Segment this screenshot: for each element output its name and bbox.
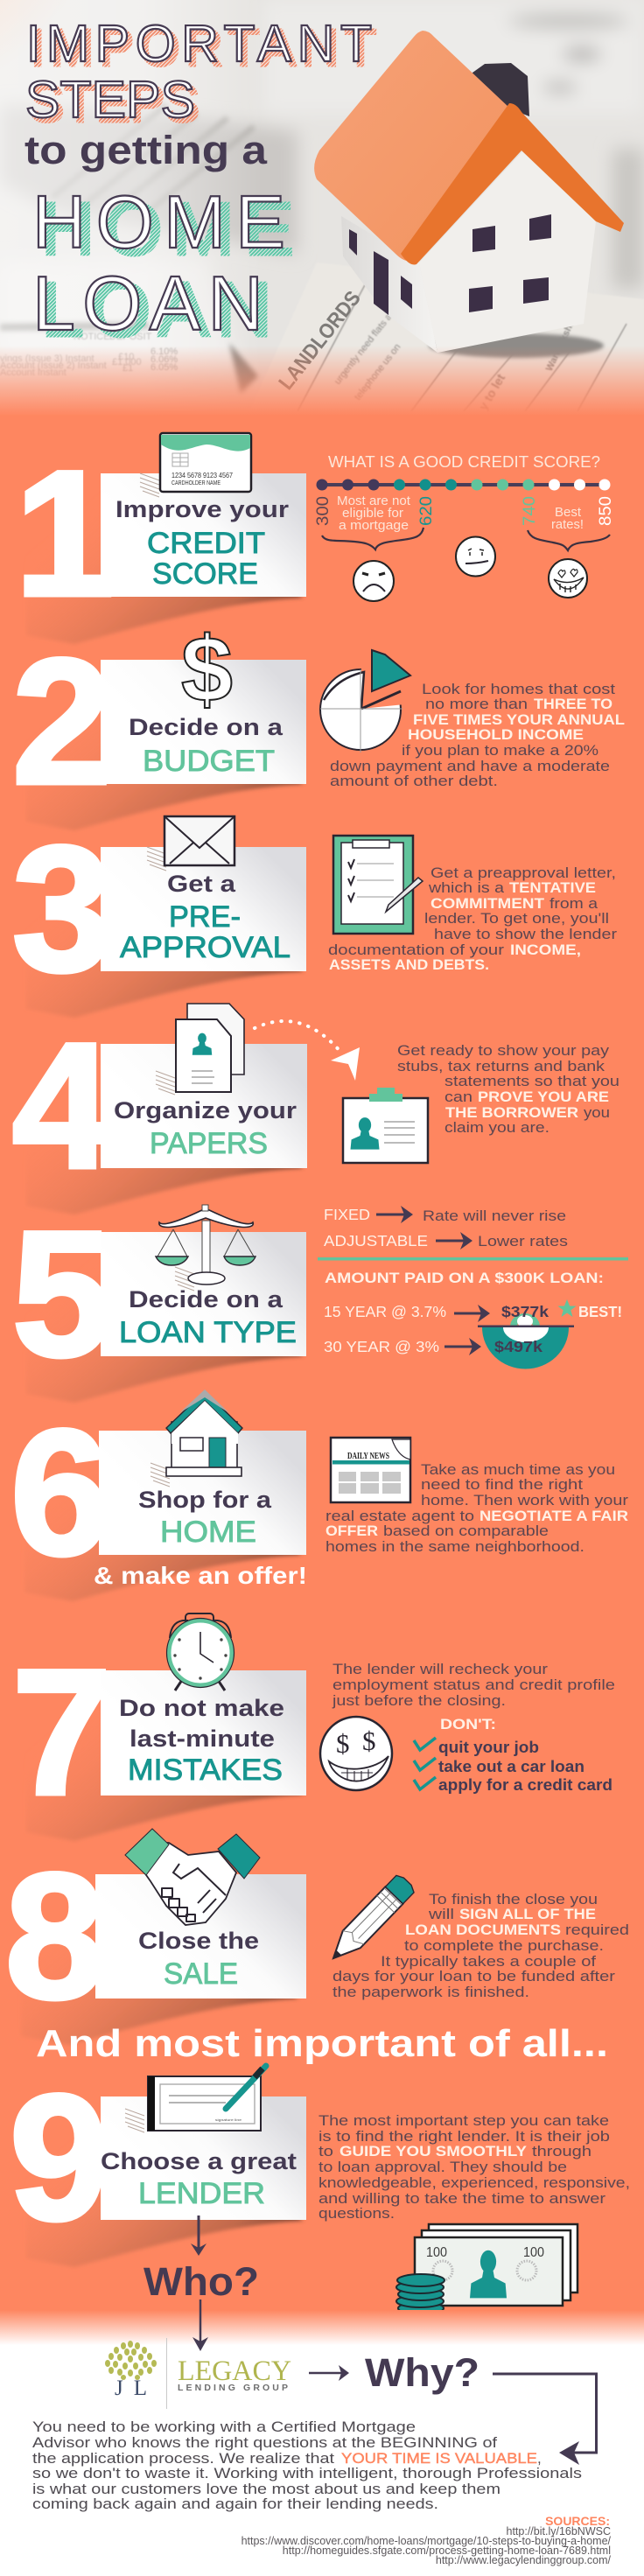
best rates note: Best [555, 505, 582, 520]
text: closing advice [332, 1891, 629, 2000]
heading: Decide on a [129, 714, 284, 740]
text: choosing a lender: and willing to take the time to answer [318, 2190, 606, 2207]
keyword: BUDGET [143, 745, 275, 778]
text: home search advice: home. Then work with your [421, 1492, 628, 1508]
newspaper small print: telephone us on [353, 342, 403, 402]
text: lender recheck: The lender will recheck your [332, 1661, 548, 1677]
keyword: APPROVAL [120, 931, 290, 964]
heading: why: Why? [365, 2350, 480, 2395]
text: pre-approval advice: COMMITMENT [430, 896, 544, 912]
newspaper headline: LANDLORDS: LANDLORDS [274, 287, 366, 395]
sources [242, 2514, 612, 2566]
keyword: LENDER [138, 2177, 265, 2210]
title [24, 15, 376, 353]
arrow: who to logo [192, 2300, 208, 2351]
30 year row: 30 YEAR @ 3% [324, 1338, 439, 1355]
don't list [414, 1717, 612, 1794]
title line: to getting a: to getting a [24, 128, 268, 172]
heading: Do not make [119, 1695, 284, 1721]
brace right [528, 530, 610, 550]
text: pre-approval advice [328, 864, 617, 973]
text: home search advice [326, 1461, 628, 1555]
newspaper small print: NOTICE [74, 332, 110, 342]
text: paperwork advice: claim you are. [444, 1119, 550, 1136]
text: choosing a lender: The most important step you can take [318, 2112, 609, 2129]
make an offer caption: & make an offer! [94, 1562, 307, 1589]
logo tagline: LENDING GROUP [178, 2383, 288, 2393]
newspaper small print: £1,000 [112, 357, 142, 368]
icon: pie chart [320, 648, 411, 752]
score labels [314, 496, 615, 526]
number 3: 3 [12, 809, 111, 1009]
icon: money eyes face [320, 1717, 392, 1790]
step 5 panel: loan type [12, 1194, 306, 1403]
sources: http://bit.ly/16bNWSC [506, 2525, 611, 2538]
number 5: 5 [12, 1194, 111, 1394]
icon: money and coins: 100 [523, 2245, 544, 2260]
text: why choose legacy: , [537, 2450, 542, 2467]
text: closing advice: LOAN DOCUMENTS [405, 1922, 561, 1938]
text: home search advice: based on comparable [383, 1522, 549, 1539]
15 year row [324, 1299, 622, 1322]
not eligible note: Most are not [337, 494, 411, 508]
title line: LOAN: LOAN [41, 266, 272, 353]
text: pre-approval advice: ASSETS AND DEBTS. [329, 957, 489, 973]
icon: house [150, 1390, 242, 1487]
text: closing advice: the paperwork is finished. [332, 1984, 529, 2000]
30 year row: $497k [494, 1338, 542, 1355]
text: paperwork advice: you [584, 1104, 610, 1121]
icon: money and coins [396, 2224, 578, 2314]
elbow arrow: why to text [493, 2374, 597, 2465]
icon: money and coins: 100 [426, 2245, 447, 2260]
arrow: logo to why [309, 2365, 349, 2381]
text: pre-approval advice: documentation of your [328, 942, 504, 958]
text: home search advice: need to find the right [421, 1476, 583, 1493]
newspaper small print: vings (Issue 3) Instant [0, 354, 94, 364]
sources: http://homeguides.sfgate.com/process-getting-home-loan-7689.html [283, 2544, 611, 2557]
text: pre-approval advice: lender. To get one, you'll [424, 910, 609, 927]
step 1 panel: credit score [15, 433, 306, 644]
text: budget advice [330, 681, 625, 789]
newspaper small print: y to let [476, 371, 508, 413]
checkmarks [414, 1738, 436, 1789]
icon: check and pen [125, 2066, 266, 2132]
text: budget advice: HOUSEHOLD INCOME [408, 727, 584, 743]
icon: happy face [549, 559, 587, 598]
coral fade at bottom of header [0, 346, 644, 420]
text: choosing a lender: to [318, 2143, 333, 2160]
15 year row: BEST! [578, 1303, 622, 1320]
not eligible note: eligible for [342, 506, 403, 521]
text: budget advice: no more than [425, 696, 528, 712]
newspaper small print: DEPOSIT [109, 332, 152, 342]
logo monogram: JL [115, 2376, 147, 2400]
text: paperwork advice: Get ready to show your pay [397, 1042, 610, 1059]
text: choosing a lender: GUIDE YOU SMOOTHLY [340, 2144, 527, 2160]
keyword: PRE- [169, 900, 241, 934]
heading: who: Who? [144, 2259, 259, 2304]
30 year row [324, 1338, 542, 1355]
logo tree [105, 2341, 157, 2380]
icon: handshake [125, 1829, 260, 1925]
score labels: 740 [521, 496, 539, 526]
icon: envelope [147, 816, 234, 871]
text: budget advice: THREE TO [534, 696, 612, 712]
text: why choose legacy: You need to be working with a Certified Mortgage [32, 2418, 416, 2435]
newspaper small print: 6.06% [150, 354, 178, 365]
icon: documents [156, 1004, 244, 1095]
fixed rate row [324, 1206, 566, 1224]
scale title: WHAT IS A GOOD CREDIT SCORE? [328, 452, 600, 471]
text: budget advice: down payment and have a moderate [330, 758, 610, 774]
text: why choose legacy: Advisor who knows the right questions at the BEGINNING of [32, 2434, 497, 2451]
icon: pencil [325, 1873, 416, 1967]
icon: sad face [354, 561, 394, 601]
text: budget advice: Look for homes that cost [422, 681, 615, 697]
heading: Organize your [114, 1097, 298, 1124]
icon: check and pen: signature line [215, 2118, 242, 2122]
keyword: SALE [164, 1957, 238, 1991]
15 year row: 15 YEAR @ 3.7% [324, 1303, 446, 1320]
keyword: CREDIT [147, 527, 265, 560]
heading: and most important of all: And most important of all... [36, 2022, 608, 2065]
icon: clipboard with checklist [333, 836, 423, 934]
brace left [322, 528, 424, 550]
number 7: 7 [12, 1633, 111, 1832]
icon: clipboard with ID [343, 1088, 428, 1163]
text: closing advice: will [428, 1906, 454, 1922]
icon: dollar sign: $ [181, 618, 233, 721]
don't list: apply for a credit card [438, 1776, 612, 1794]
amount paid heading: AMOUNT PAID ON A $300K LOAN: [325, 1270, 604, 1286]
text: choosing a lender: knowledgeable, experienced, responsive, [318, 2174, 630, 2191]
not eligible note: a mortgage [339, 518, 409, 533]
newspaper small print: 6.10% [150, 346, 178, 357]
text: lender recheck: just before the closing. [332, 1692, 506, 1709]
text: paperwork advice: THE BORROWER [445, 1105, 578, 1121]
text: home search advice: OFFER [326, 1523, 378, 1539]
text: closing advice: required [565, 1922, 629, 1938]
text: paperwork advice: stubs, tax returns and bank [397, 1058, 606, 1074]
icon: scales [156, 1205, 256, 1291]
newspaper small print: urgently need flats and houses [332, 276, 422, 387]
text: pre-approval advice: which is a [428, 879, 505, 896]
text: closing advice: days for your loan to be funded after [332, 1968, 615, 1984]
text: budget advice: amount of other debt. [330, 773, 498, 789]
newspaper small print [0, 276, 580, 413]
text: choosing a lender: questions. [318, 2205, 395, 2222]
step 2 panel: budget [12, 618, 306, 830]
15 year row: $377k [501, 1303, 549, 1320]
heading: Decide on a [129, 1286, 284, 1312]
chart: bowl of loan amounts [478, 1313, 574, 1368]
text: closing advice: SIGN ALL OF THE [459, 1907, 596, 1922]
number 4: 4 [12, 1006, 111, 1206]
title line: IMPORTANT: IMPORTANT [31, 19, 376, 77]
heading: last-minute [130, 1726, 275, 1752]
score labels: 620 [417, 496, 436, 526]
icon: money eyes face: $ [362, 1726, 376, 1756]
text: lender recheck [332, 1661, 615, 1709]
keyword: HOME [160, 1516, 256, 1549]
score labels: 850 [597, 496, 615, 526]
title line: LOAN: LOAN [32, 260, 263, 346]
heading: Close the [138, 1928, 259, 1954]
step 4 panel: papers [12, 1004, 307, 1214]
icon: credit card: CARDHOLDER NAME [172, 480, 220, 486]
step 3 panel: pre-approval [12, 809, 306, 1018]
text: budget advice: if you plan to make a 20% [402, 742, 598, 759]
text: home search advice: Take as much time as you [421, 1461, 615, 1478]
title line: HOME: HOME [41, 188, 294, 271]
fixed rate row: Rate will never rise [423, 1208, 566, 1224]
logo: Legacy Lending Group [105, 2338, 291, 2409]
title line: HOME: HOME [32, 181, 285, 264]
icon: newspaper: DAILY NEWS [347, 1451, 389, 1461]
text: home search advice: NEGOTIATE A FAIR [480, 1508, 628, 1524]
heading: Shop for a [138, 1487, 272, 1513]
text: home search advice: homes in the same neighborhood. [326, 1538, 584, 1555]
don't list: DON'T: [440, 1717, 496, 1732]
not eligible note [337, 494, 411, 533]
sources: http://www.legacylendinggroup.com/ [436, 2554, 612, 2566]
number 2: 2 [12, 622, 111, 822]
text: paperwork advice: can [444, 1088, 472, 1105]
logo wordmark: LEGACY [178, 2356, 291, 2387]
sources: https://www.discover.com/home-loans/mortgage/10-steps-to-buying-a-home/ [242, 2535, 612, 2547]
text: paperwork advice: statements so that you [444, 1073, 620, 1089]
keyword: LOAN TYPE [119, 1316, 297, 1349]
number 8: 8 [5, 1837, 104, 2036]
text: choosing a lender: is to find the right lender. It is their job [318, 2128, 610, 2145]
title line: IMPORTANT: IMPORTANT [26, 15, 372, 73]
dotted arrow [255, 1021, 360, 1081]
text: paperwork advice [397, 1042, 620, 1136]
text: paperwork advice: PROVE YOU ARE [478, 1089, 609, 1105]
keyword: MISTAKES [128, 1754, 283, 1787]
icon: neutral face [456, 537, 495, 576]
text: budget advice: FIVE TIMES YOUR ANNUAL [413, 712, 625, 728]
best rates note [551, 505, 584, 532]
icon: credit card: 1234 5678 9123 4567 [172, 471, 233, 480]
text: lender recheck: employment status and credit profile [332, 1676, 615, 1693]
step 6 panel: home [10, 1390, 306, 1601]
text: closing advice: It typically takes a couple of [381, 1953, 596, 1970]
keyword: SCORE [152, 557, 258, 591]
header photo: home on newspaper [0, 0, 644, 420]
adjustable rate row: ADJUSTABLE [324, 1232, 428, 1250]
title line: STEPS: STEPS [25, 71, 195, 129]
text: why choose legacy: so we don't to waste it. Working with intelligent, thorough Professionals [32, 2465, 582, 2482]
score dots timeline [317, 480, 611, 490]
icon: newspaper [331, 1438, 410, 1502]
heading: Choose a great [101, 2148, 297, 2174]
keyword: PAPERS [150, 1127, 268, 1160]
step 7 panel: mistakes [12, 1614, 306, 1841]
newspaper small print: Warwickshire [544, 312, 580, 373]
text: pre-approval advice: TENTATIVE [509, 880, 596, 896]
icon: alarm clock [166, 1614, 234, 1690]
number 1: 1 [15, 434, 114, 634]
step 8 panel: sale [5, 1829, 306, 2045]
text: closing advice: To finish the close you [429, 1891, 598, 1908]
newspaper small print: £1 [122, 363, 133, 374]
text: pre-approval advice: Get a preapproval letter, [430, 864, 616, 881]
text: choosing a lender: through [532, 2143, 592, 2160]
credit score scale [314, 452, 615, 601]
heading: Improve your [116, 496, 290, 522]
newspaper small print: 6.05% [150, 362, 178, 373]
sources: SOURCES: [545, 2514, 610, 2528]
newspaper small print: Account Instant [0, 368, 66, 378]
icon: credit card [140, 433, 251, 497]
newspaper small print: £10 [118, 352, 134, 362]
don't list: quit your job [438, 1739, 539, 1756]
heading: Get a [167, 871, 236, 897]
text: pre-approval advice: from a [550, 895, 598, 912]
adjustable rate row: Lower rates [478, 1233, 568, 1250]
number 9: 9 [10, 2058, 108, 2258]
icon: money eyes face: $ [336, 1728, 350, 1759]
best rates note: rates! [551, 517, 584, 532]
text: why choose legacy: the application process. We realize that [32, 2450, 334, 2467]
loan type comparison [318, 1206, 628, 1368]
fixed rate row: FIXED [324, 1206, 370, 1223]
text: choosing a lender: to loan approval. They should be [318, 2159, 567, 2175]
adjustable rate row [324, 1232, 568, 1250]
number 6: 6 [10, 1393, 109, 1592]
score labels: 300 [314, 496, 332, 526]
arrow: lender to who [191, 2216, 206, 2256]
title line: STEPS: STEPS [30, 75, 200, 133]
text: home search advice: real estate agent to [326, 1508, 474, 1524]
text: why choose legacy: is what our customers love the most about us and keep them [32, 2481, 500, 2497]
step 9 panel: lender [10, 2058, 306, 2267]
house illustration [314, 31, 624, 358]
text: why choose legacy: coming back again and again for their lending needs. [32, 2496, 438, 2512]
text: pre-approval advice: INCOME, [510, 942, 581, 958]
text: why choose legacy [32, 2418, 582, 2512]
text: closing advice: to complete the purchase. [404, 1937, 604, 1954]
text: choosing a lender [318, 2112, 630, 2222]
newspaper small print: Account (Issue 2) Instant [0, 360, 107, 371]
don't list: take out a car loan [438, 1758, 584, 1775]
text: why choose legacy: YOUR TIME IS VALUABLE [341, 2450, 537, 2467]
white footer background [0, 2310, 644, 2576]
newspaper column lines [298, 280, 626, 411]
text: pre-approval advice: have to show the lender [434, 926, 617, 942]
